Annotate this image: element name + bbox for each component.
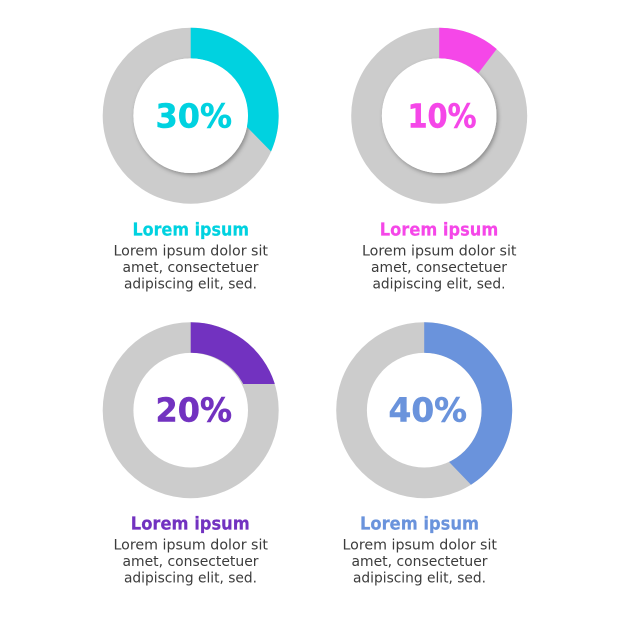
panel: 30% metric xyxy=(103,28,279,293)
text block: description: adipiscing elit, sed. xyxy=(124,277,257,293)
value: 20%: 20% xyxy=(156,391,232,430)
text block: description: amet, consectetuer xyxy=(352,554,488,570)
text block: description: amet, consectetuer xyxy=(122,554,259,570)
text block: description: Lorem ipsum dolor sit xyxy=(114,538,268,554)
panel: 40% metric xyxy=(336,322,512,587)
heading: purple: Lorem ipsum xyxy=(131,515,250,535)
value: 40%: 40% xyxy=(388,391,467,430)
text block: description: Lorem ipsum dolor sit xyxy=(342,538,497,554)
text block: description: adipiscing elit, sed. xyxy=(124,571,257,587)
value: 30%: 30% xyxy=(156,97,232,136)
donut chart: 30% xyxy=(103,28,279,204)
donut chart: 20% xyxy=(103,322,279,498)
donut chart: 10% xyxy=(351,28,527,204)
heading: pink: Lorem ipsum xyxy=(380,221,498,241)
text block: description xyxy=(342,538,497,587)
text block: description xyxy=(362,244,517,293)
panel: 20% metric xyxy=(103,322,279,587)
text block: description: adipiscing elit, sed. xyxy=(372,277,506,293)
heading: cyan: Lorem ipsum xyxy=(132,221,249,241)
donut chart: 40% xyxy=(336,322,512,498)
text block: description xyxy=(114,244,268,293)
text block: description: amet, consectetuer xyxy=(122,260,259,276)
text block: description: adipiscing elit, sed. xyxy=(353,571,486,587)
text block: description: amet, consectetuer xyxy=(371,260,507,276)
heading: blue: Lorem ipsum xyxy=(360,515,479,535)
text block: description: Lorem ipsum dolor sit xyxy=(114,244,268,260)
text block: description: Lorem ipsum dolor sit xyxy=(362,244,517,260)
value: 10%: 10% xyxy=(408,97,476,136)
text block: description xyxy=(114,538,268,587)
panel: 10% metric xyxy=(351,28,527,293)
